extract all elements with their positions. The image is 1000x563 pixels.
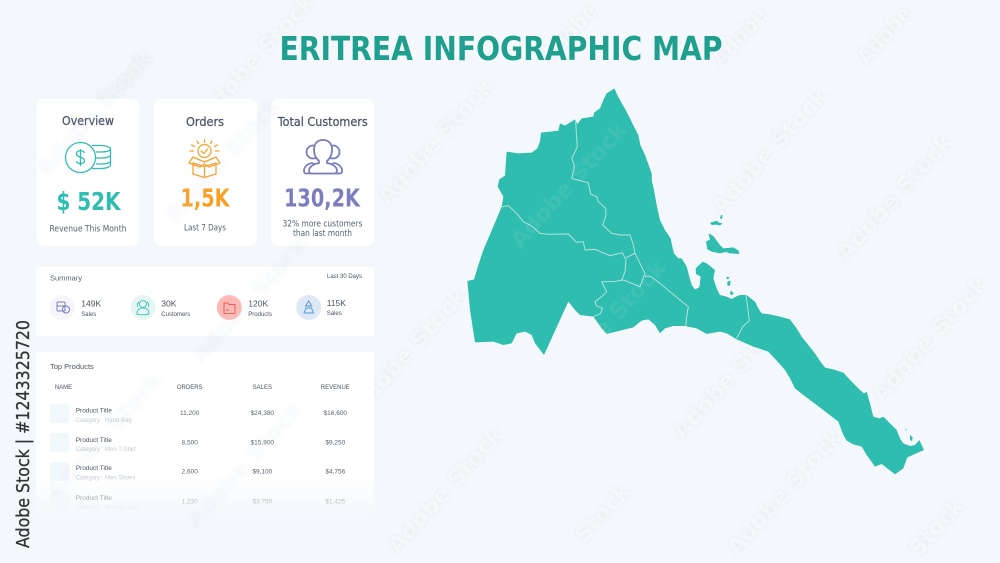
stock watermark pattern: Stock xyxy=(904,492,971,562)
row 4: $1,425 xyxy=(325,499,346,506)
row 2: Product Title xyxy=(76,437,112,444)
stock watermark pattern: Adobe Stock xyxy=(707,83,834,219)
period label: Last 30 Days xyxy=(327,274,362,280)
stock watermark pattern: Adobe Stock xyxy=(373,73,500,209)
stock watermark pattern: Adobe Stock xyxy=(32,45,159,181)
row 3: $9,100 xyxy=(252,469,273,476)
stock watermark pattern: Adobe Stock xyxy=(832,129,959,265)
stat: sales second xyxy=(296,295,346,320)
row 2: $9,250 xyxy=(325,440,346,447)
row 4 xyxy=(50,491,346,511)
caption: revenue: Revenue This Month xyxy=(50,224,126,234)
stock watermark pattern: Adobe Stock xyxy=(346,283,473,419)
stat: products: Products xyxy=(248,312,272,318)
row 1: 11,200 xyxy=(180,410,200,417)
stock watermark pattern: Adobe Stock xyxy=(32,45,159,181)
table header: ORDERS xyxy=(177,385,203,391)
panel: orders xyxy=(154,99,257,246)
caption: customers: 32% more customers xyxy=(282,220,363,230)
region borders xyxy=(502,120,749,338)
faint watermark over panels and map: Adobe Stock xyxy=(506,117,633,253)
islands xyxy=(706,215,913,442)
stat: customers xyxy=(130,295,190,320)
row 4: Product Title xyxy=(76,495,112,502)
stock watermark pattern: Adobe Stock xyxy=(722,424,849,560)
panel: overview xyxy=(36,99,139,246)
row 3: $4,756 xyxy=(325,469,346,476)
stat: customers: Customers xyxy=(161,312,190,318)
heading: summary: Summary xyxy=(50,274,82,282)
row 1: Product Title xyxy=(76,408,112,415)
faint watermark over panels and map: Adobe Stock xyxy=(42,367,169,503)
row 1: $24,380 xyxy=(251,410,274,417)
stat: sales: Sales xyxy=(81,312,96,318)
table header: REVENUE xyxy=(321,385,350,391)
value: orders: 1,5K xyxy=(180,184,231,212)
stock watermark pattern: Adobe Stock xyxy=(373,73,500,209)
table header: NAME xyxy=(55,385,72,391)
row 2: 8,500 xyxy=(182,440,198,447)
caption: customers xyxy=(282,220,363,239)
row 2: $15,900 xyxy=(251,440,274,447)
value: customers: 130,2K xyxy=(284,184,361,212)
stock watermark pattern: Adobe Stock xyxy=(668,308,795,444)
stat: products xyxy=(217,295,272,320)
stock watermark pattern: Adobe Stock xyxy=(867,271,994,407)
heading: overview: Overview xyxy=(62,114,114,128)
icon: user group xyxy=(304,140,342,174)
panel: summary xyxy=(36,267,374,336)
row 2: Category : Men T-Shirt xyxy=(76,447,136,453)
stat: products: 120K xyxy=(248,298,268,308)
stock watermark pattern: Adobe Stock xyxy=(722,424,849,560)
row 4: 1,230 xyxy=(182,499,198,506)
title: ERITREA INFOGRAPHIC MAP xyxy=(280,29,722,68)
panel: top products table xyxy=(36,352,374,524)
icon: open box with check xyxy=(189,140,220,178)
stat: customers: 30K xyxy=(161,298,177,308)
caption: orders: Last 7 Days xyxy=(184,224,226,234)
map: Eritrea xyxy=(467,88,924,474)
faint watermark over panels and map: Adobe Stock xyxy=(545,255,672,391)
stock watermark pattern: Adobe Stock xyxy=(867,271,994,407)
stock watermark pattern: Adobe Stock xyxy=(668,308,795,444)
vertical stock id: Adobe Stock | #1243325720 xyxy=(13,320,34,548)
heading: total customers: Total Customers xyxy=(277,115,368,129)
stock watermark pattern: Adobe Stock xyxy=(707,83,834,219)
stat: sales second: 115K xyxy=(327,298,346,308)
stock watermark pattern: Adobe Stock xyxy=(383,422,510,558)
row 1 xyxy=(50,404,347,424)
row 4: $3,750 xyxy=(252,499,273,506)
faint watermark over panels and map: Adobe Stock xyxy=(32,45,159,181)
icon: coins xyxy=(66,142,110,172)
table header xyxy=(55,385,350,391)
row 3 xyxy=(50,462,346,481)
faint watermark over panels and map xyxy=(32,45,672,533)
row 1: $16,600 xyxy=(324,410,347,417)
value: revenue: $ 52K xyxy=(56,187,122,216)
stock watermark pattern: Stock xyxy=(570,478,637,548)
stock watermark pattern: Stock xyxy=(904,492,971,562)
stat: sales: 149K xyxy=(81,298,101,308)
stat: sales xyxy=(50,295,101,320)
row 3: Product Title xyxy=(76,465,112,472)
caption: customers: than last month xyxy=(293,229,352,239)
row 3: Category : Men Shoes xyxy=(76,475,135,481)
row 3: 2,600 xyxy=(182,469,198,476)
table header: SALES xyxy=(253,385,272,391)
stock watermark pattern: Stock xyxy=(570,478,637,548)
stock watermark pattern: Adobe Stock xyxy=(832,129,959,265)
faint watermark over panels and map: Adobe Stock xyxy=(187,232,314,368)
panel: total customers xyxy=(271,99,374,246)
stat: sales second: Sales xyxy=(327,311,342,317)
row 4: Category : Woman Bag xyxy=(76,505,138,511)
faint watermark over panels and map: Adobe Stock xyxy=(160,92,287,228)
row 2 xyxy=(50,433,346,453)
faint watermark over panels and map: Adobe Stock xyxy=(182,397,309,533)
stock watermark pattern: Adobe Stock xyxy=(383,422,510,558)
row 1: Category : Hand Bag xyxy=(76,418,132,424)
stock watermark pattern: Adobe Stock xyxy=(346,283,473,419)
heading: orders: Orders xyxy=(186,115,224,129)
heading: top products: Top Products xyxy=(50,362,94,371)
